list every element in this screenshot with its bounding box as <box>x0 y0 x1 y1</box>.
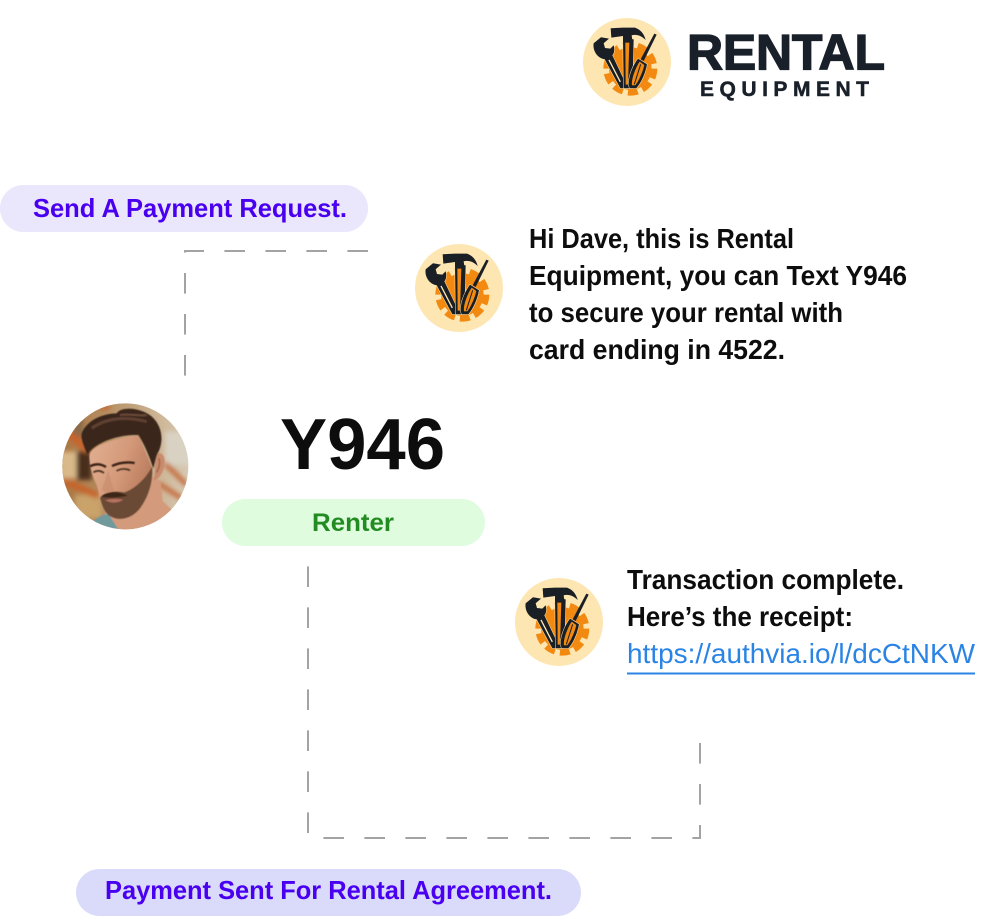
icon: tools badge (request message) <box>415 244 503 332</box>
icon: tools badge (logo) <box>583 18 671 106</box>
pill: Payment Sent For Rental Agreement <box>76 869 581 916</box>
message text: request <box>529 223 907 365</box>
dashed connector: request to renter <box>185 251 368 376</box>
dashed connector: renter to receipt <box>308 565 700 838</box>
code: Y946: Y946 <box>280 405 445 485</box>
message text: request: to secure your rental with <box>529 297 843 328</box>
pill: Payment Sent For Rental Agreement: Payment Sent For Rental Agreement. <box>105 875 552 905</box>
pill: Send A Payment Request: Send A Payment Request. <box>33 193 347 223</box>
message block: payment request <box>415 223 907 365</box>
message text: request: Equipment, you can Text Y946 <box>529 260 907 291</box>
message text: receipt <box>627 564 904 632</box>
logo: Rental Equipment <box>583 18 885 106</box>
pill: Renter <box>222 499 485 546</box>
portrait: renter photo <box>60 402 192 533</box>
message block: receipt <box>515 564 976 674</box>
pill: Renter: Renter <box>312 509 394 537</box>
pill: Send A Payment Request <box>0 185 368 232</box>
receipt link: https://authvia.io/l/dcCtNKW <box>627 638 976 669</box>
message text: request: Hi Dave, this is Rental <box>529 223 794 254</box>
message text: request: card ending in 4522. <box>529 334 785 365</box>
logo wordmark: EQUIPMENT: EQUIPMENT <box>700 78 869 101</box>
logo wordmark: RENTAL: RENTAL <box>687 24 885 80</box>
icon: tools badge (receipt message) <box>515 578 603 666</box>
message text: receipt: Here’s the receipt: <box>627 601 853 632</box>
message text: receipt: Transaction complete. <box>627 564 904 595</box>
